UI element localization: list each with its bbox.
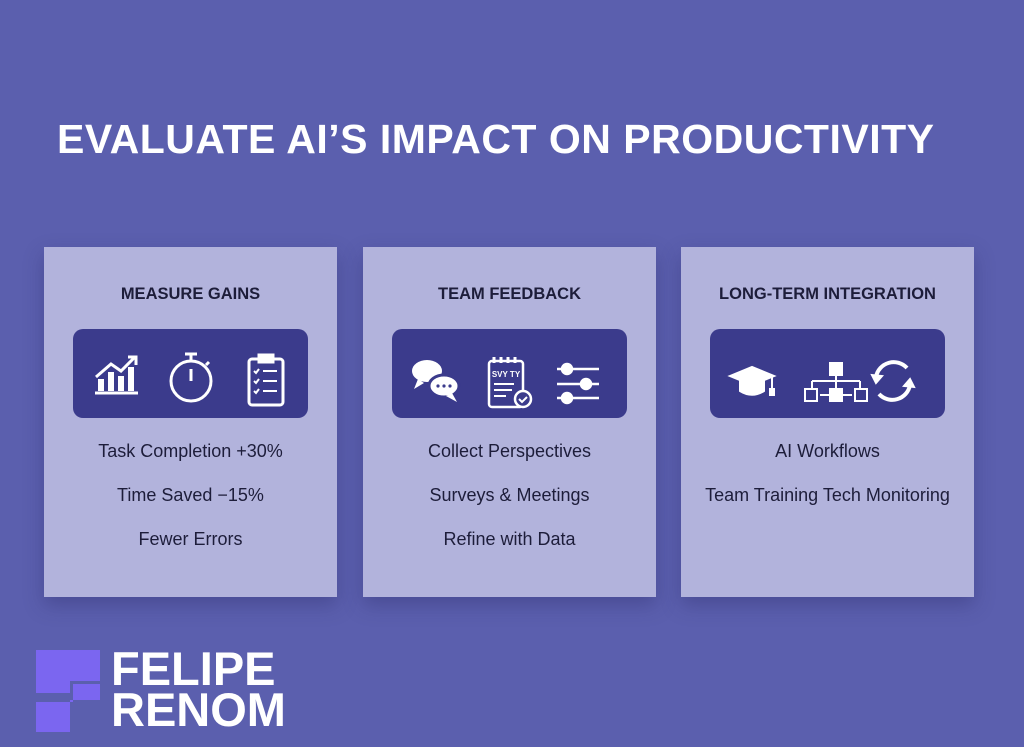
heading: long-term integration: LONG-TERM INTEGRATION bbox=[719, 285, 936, 303]
icon box: long-term integration bbox=[710, 329, 945, 418]
text: time saved: Time Saved −15% bbox=[117, 485, 264, 505]
icon: graduation cap bbox=[730, 367, 774, 395]
icon box: team feedback bbox=[392, 329, 627, 418]
panel: measure gains bbox=[44, 247, 337, 597]
icon: org chart bbox=[805, 363, 867, 401]
icon: stopwatch bbox=[171, 354, 211, 401]
text: fewer errors: Fewer Errors bbox=[138, 529, 242, 549]
icon: growth chart bbox=[95, 357, 138, 393]
text: ai workflows: AI Workflows bbox=[775, 441, 880, 461]
logo text: FELIPE bbox=[111, 642, 276, 695]
icon box: measure gains bbox=[73, 329, 308, 418]
logo text bbox=[111, 642, 286, 736]
text: surveys & meetings: Surveys & Meetings bbox=[429, 485, 590, 505]
text: team training tech monitoring: Team Training Tech Monitoring bbox=[705, 485, 950, 505]
icon: survey bbox=[489, 357, 531, 407]
text: task completion: Task Completion +30% bbox=[98, 441, 283, 461]
text: collect perspectives: Collect Perspectives bbox=[428, 441, 591, 461]
heading: measure gains: MEASURE GAINS bbox=[121, 285, 260, 303]
panel: team feedback bbox=[363, 247, 656, 597]
icon: survey: SVY TY bbox=[492, 370, 521, 379]
icon: clipboard bbox=[249, 355, 283, 405]
panel: long-term integration bbox=[681, 247, 974, 597]
icon: chat bubbles bbox=[412, 360, 459, 402]
icon: sliders bbox=[557, 364, 599, 403]
logo text: RENOM bbox=[111, 683, 286, 736]
heading: team feedback: TEAM FEEDBACK bbox=[438, 285, 581, 303]
title: EVALUATE AI’S IMPACT ON PRODUCTIVITY bbox=[57, 116, 934, 162]
icon: refresh bbox=[872, 362, 914, 400]
text: refine with data: Refine with Data bbox=[443, 529, 576, 549]
